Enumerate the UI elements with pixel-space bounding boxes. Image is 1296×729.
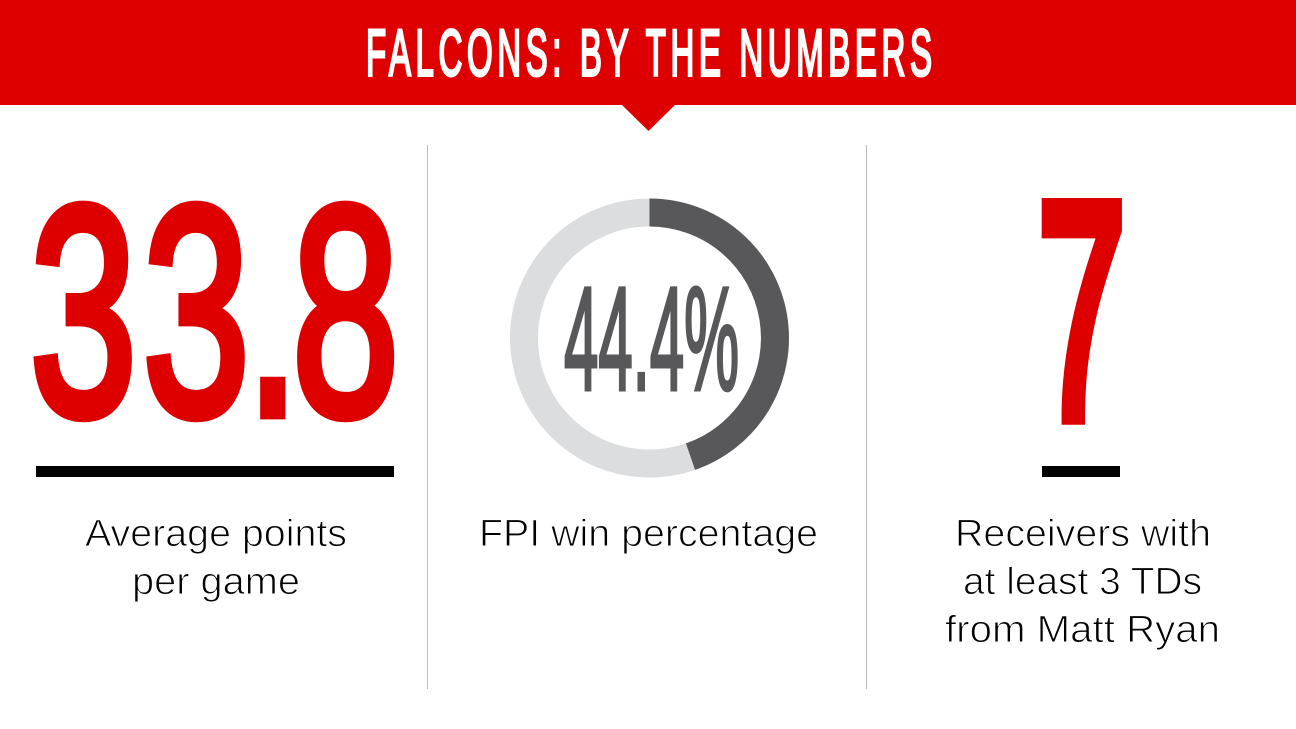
panel: average points <box>30 145 399 603</box>
caption: receivers with at least 3 TDs from Matt Ryan <box>945 513 1220 651</box>
caption: average points per game: Average points <box>85 513 347 555</box>
underline bar <box>1042 466 1120 477</box>
caption: receivers with at least 3 TDs from Matt Ryan: at least 3 TDs <box>963 561 1202 603</box>
panel: FPI win percentage <box>479 212 818 555</box>
underline bar <box>36 466 394 477</box>
donut value: 44.4%: 44.4% <box>564 257 739 421</box>
caption: average points per game: per game <box>132 561 300 603</box>
caption: average points per game <box>85 513 347 603</box>
title: FALCONS: BY THE NUMBERS <box>366 17 932 91</box>
caption: FPI win percentage: FPI win percentage <box>479 513 818 555</box>
header banner <box>0 0 1296 131</box>
caption: receivers with at least 3 TDs from Matt Ryan: from Matt Ryan <box>945 609 1220 651</box>
caption: receivers with at least 3 TDs from Matt Ryan: Receivers with <box>955 513 1211 555</box>
big number: 33.8: 33.8 <box>30 145 399 478</box>
donut chart <box>524 212 775 464</box>
panel: receivers <box>945 142 1220 651</box>
big number: 7: 7 <box>1038 142 1125 481</box>
